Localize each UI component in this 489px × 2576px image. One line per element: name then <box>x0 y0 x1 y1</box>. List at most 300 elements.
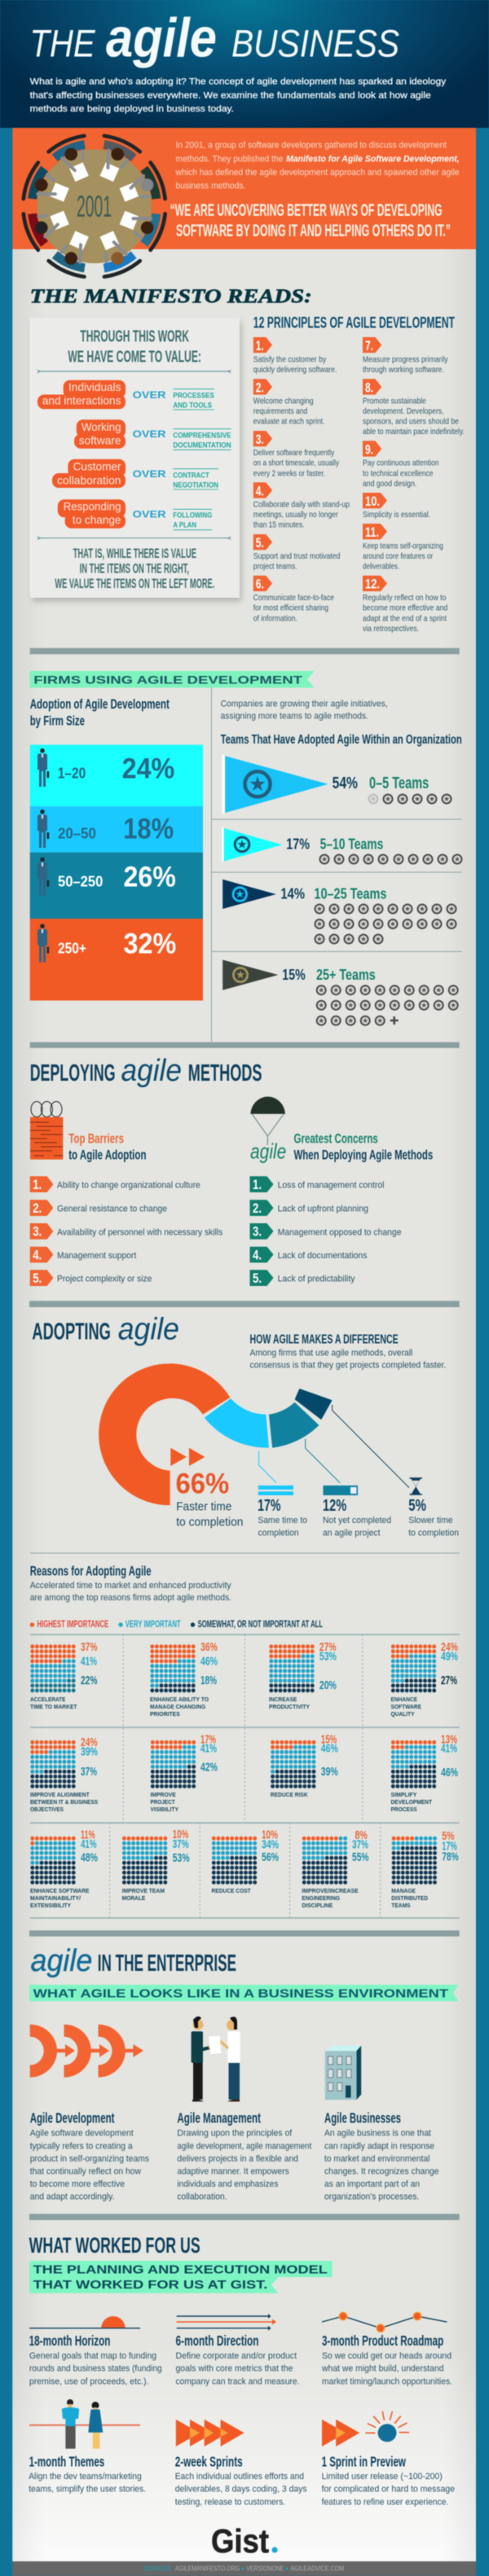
principle 12: adapt at the end of a sprint <box>363 614 447 623</box>
dot chart: improve engineering discipline: ENGINEERING <box>302 1894 340 1902</box>
principle 8: sponsors, and users should be <box>363 418 459 427</box>
value row: responding to change: to change <box>73 513 121 526</box>
barrier 3: Availability of personnel with necessary skills <box>57 1227 222 1237</box>
barrier 1: 1. <box>33 1177 42 1192</box>
dot chart: improve engineering discipline: 8% <box>355 1829 368 1842</box>
pennant: 15% 25+ teams <box>222 959 458 1025</box>
principle 6 <box>253 576 334 623</box>
principle 10: Simplicity is essential. <box>363 511 430 520</box>
stat: 12% not yet <box>323 1485 391 1538</box>
principle 7: Measure progress primarily <box>363 355 448 364</box>
stat: 12% not yet: Not yet completed <box>323 1516 391 1525</box>
dot chart: improve project visibility: PROJECT <box>150 1798 175 1806</box>
card closing statement: WE VALUE THE ITEMS ON THE LEFT MORE. <box>55 576 214 591</box>
dot chart: simplify development process: 46% <box>441 1766 458 1780</box>
ribbon: planning and execution model: THE PLANNING AND EXECUTION MODEL <box>33 2264 328 2277</box>
dot chart: accelerate time to market: TIME TO MARKET <box>30 1703 77 1710</box>
principle 6: 6. <box>256 577 264 592</box>
dot chart: manage distributed teams: 17% <box>442 1841 457 1854</box>
stat: 66% faster: to completion <box>176 1515 243 1529</box>
text: agile management: adaptive manner. It empowers <box>177 2166 289 2176</box>
value row: responding to change: Responding <box>64 500 121 513</box>
difference heading and text: HOW AGILE MAKES A DIFFERENCE <box>249 1332 399 1346</box>
text: agile businesses: Agile Businesses <box>324 2110 401 2126</box>
dot chart: enhance software quality: SOFTWARE <box>391 1703 421 1710</box>
value row: responding to change <box>58 499 212 530</box>
dot chart: increase productivity: 27% <box>319 1641 337 1654</box>
concern 5: 5. <box>253 1270 262 1286</box>
item: 1-month themes: teams, simplify the user stories. <box>29 2485 146 2495</box>
principle 5: project teams. <box>253 563 297 572</box>
card closing statement <box>55 546 214 591</box>
dot chart: improve team morale: MORALE <box>122 1894 145 1902</box>
barrier 1 <box>30 1176 200 1192</box>
concern 5 <box>249 1270 355 1286</box>
dot chart: manage distributed teams <box>391 1830 459 1909</box>
title <box>29 7 399 68</box>
principle 4: than 15 minutes. <box>253 521 305 530</box>
dot chart: improve engineering discipline: 37% <box>352 1839 368 1852</box>
dot chart: increase productivity: 20% <box>319 1679 337 1692</box>
value row: individuals: OVER <box>133 391 166 401</box>
dot chart: improve engineering discipline: IMPROVE/INCREASE <box>302 1887 359 1894</box>
principle 3 <box>253 431 340 478</box>
dot chart: enhance software maintainability: MAINTAINABILITY/ <box>30 1894 82 1902</box>
stat: 5% slower: Slower time <box>408 1516 453 1525</box>
dot chart: increase productivity: INCREASE <box>269 1696 297 1703</box>
ribbon: what agile looks like: WHAT AGILE LOOKS LIKE IN A BUSINESS ENVIRONMENT <box>33 1987 448 2000</box>
dot chart: reduce cost: 10% <box>262 1829 278 1842</box>
dot chart: improve alignment <box>30 1736 98 1813</box>
dot chart: improve alignment: 24% <box>81 1736 98 1749</box>
panel: header <box>0 0 489 128</box>
item: 1 sprint in preview: for complicated or hard to message <box>322 2485 455 2495</box>
principle 10: 10. <box>365 494 380 509</box>
stacked bar: 1-20: 1–20 <box>58 765 86 781</box>
dot chart: enhance software maintainability: 48% <box>81 1852 98 1865</box>
pennant: 17% 5-10 teams <box>222 827 461 863</box>
value row: working software: software <box>79 433 121 446</box>
panel: 12 principles <box>253 314 465 634</box>
dot chart: increase productivity <box>269 1641 337 1710</box>
dot chart: reduce risk: REDUCE RISK <box>271 1791 308 1798</box>
dot chart: improve project visibility: IMPROVE <box>150 1791 176 1798</box>
principle 4: Collaborate daily with stand-up <box>253 500 350 509</box>
principle 6: Communicate face-to-face <box>253 594 334 603</box>
dot chart: improve team morale: 37% <box>173 1838 189 1851</box>
barrier 4: 4. <box>33 1247 42 1262</box>
value row: individuals: Individuals <box>68 380 121 393</box>
stacked bar: 20-50: 18% <box>123 814 174 845</box>
dot chart: improve project visibility: 41% <box>200 1743 217 1756</box>
principle 1: quickly delivering software. <box>253 366 337 375</box>
stat: 17% same: Same time to <box>258 1516 307 1525</box>
panel: how agile makes a difference <box>99 1332 459 1538</box>
panel: top barriers: to Agile Adoption <box>68 1148 147 1163</box>
barriers heading: Top Barriers <box>68 1130 124 1146</box>
text: agile development: to become more effective <box>30 2179 125 2189</box>
item: 2-week sprints: 2-week Sprints <box>175 2453 243 2469</box>
principle 8: development. Developers, <box>363 407 444 416</box>
dot chart: improve alignment: IMPROVE ALIGNMENT <box>30 1791 90 1798</box>
panel: greatest concerns <box>249 1097 433 1286</box>
stat: 17% same: 17% <box>258 1497 281 1515</box>
value row: working software: DOCUMENTATION <box>173 441 231 450</box>
heading: adopting agile <box>32 1312 179 1346</box>
text: agile management: individuals and emphasizes <box>177 2179 279 2189</box>
dot chart: simplify development process: 41% <box>441 1743 457 1756</box>
item: 18-month horizon: premise, use of proceeds, etc.). <box>29 2376 148 2386</box>
pennant: 14% 10-25 teams: 14% <box>280 885 305 902</box>
reasons heading: Accelerated time to market and enhanced productivity <box>30 1581 231 1591</box>
dot chart: increase productivity: 53% <box>319 1651 337 1664</box>
item: 6-month direction: goals with core metrics that the <box>176 2364 293 2374</box>
icon: round table with eight people: 2001 <box>77 190 112 223</box>
stat: 17% same: completion <box>258 1528 299 1538</box>
principle 8: able to maintain pace indefinitely. <box>363 428 465 437</box>
heading: what worked for us: WHAT WORKED FOR US <box>29 2233 200 2258</box>
pennant: 15% 25+ teams: 25+ Teams <box>316 967 376 983</box>
concern 1 <box>249 1176 385 1192</box>
stat: 5% slower: to completion <box>408 1528 459 1538</box>
logo: Gist: Gist <box>211 2522 269 2560</box>
dot chart: enhance software quality: 27% <box>441 1674 457 1687</box>
intro paragraph: Manifesto for Agile Software Development, <box>286 154 460 164</box>
text: agile management: collaboration. <box>177 2192 227 2202</box>
icon: round table with eight people <box>21 134 168 279</box>
value row: responding to change: OVER <box>133 510 166 520</box>
stacked bar: 20-50: 20–50 <box>58 826 96 842</box>
text: agile development: product in self-organizing teams <box>30 2154 149 2164</box>
dot chart: improve project visibility: 42% <box>200 1761 218 1774</box>
stacked bar: 50-250: 50–250 <box>58 874 103 890</box>
card heading: THROUGH THIS WORK <box>80 327 189 345</box>
dot chart: enhance software maintainability: EXTENSIBILITY <box>30 1902 71 1909</box>
item: 3-month product roadmap <box>321 2312 452 2386</box>
barrier 5 <box>30 1270 152 1286</box>
value row: customer collaboration <box>52 459 218 489</box>
dot chart: accelerate time to market <box>30 1641 97 1710</box>
footer: sources: VERSIONONE <box>246 2565 284 2573</box>
principle 4 <box>253 482 350 530</box>
principle 9: Pay continuous attention <box>363 459 439 468</box>
principle 1: Satisfy the customer by <box>253 355 327 364</box>
concern 2: Lack of upfront planning <box>278 1204 368 1213</box>
dot chart: enhance software maintainability: ENHANCE SOFTWARE <box>30 1887 90 1894</box>
dot chart: accelerate time to market: 37% <box>81 1641 97 1654</box>
dot chart: enhance ability to manage changing priorities: 36% <box>200 1641 218 1654</box>
dot chart: manage distributed teams: DISTRIBUTED <box>391 1894 428 1902</box>
icon: brick wall with barbed wire <box>30 1101 63 1160</box>
principle 4: 4. <box>256 483 264 498</box>
panel: top barriers <box>30 1101 222 1286</box>
principle 9 <box>363 441 439 489</box>
principle 11: 11. <box>365 524 379 540</box>
text: agile businesses: as an important part of an <box>324 2179 420 2189</box>
dot chart: improve team morale: IMPROVE TEAM <box>122 1887 165 1894</box>
dot chart: reduce risk: 39% <box>321 1766 338 1779</box>
principle 2 <box>253 379 324 427</box>
text: agile management <box>177 2110 312 2202</box>
text: agile management: Agile Management <box>177 2110 261 2126</box>
stacked bar: 250+: 32% <box>124 928 176 960</box>
icon: two people exchanging a paper <box>192 2016 240 2101</box>
dot chart: simplify development process: 13% <box>441 1733 457 1746</box>
concern 1: 1. <box>253 1177 262 1192</box>
principle 6: of information. <box>253 614 297 623</box>
text: agile development: typically refers to creating a <box>30 2141 133 2151</box>
stacked bar: 250+ <box>30 919 203 1000</box>
item: 18-month horizon <box>29 2316 162 2386</box>
reasons heading: Reasons for Adopting Agile <box>30 1564 152 1578</box>
dot chart: enhance software quality <box>391 1641 458 1718</box>
value row: customer collaboration: OVER <box>133 470 166 480</box>
barrier 1: Ability to change organizational culture <box>57 1181 200 1191</box>
text: agile development <box>30 2110 149 2202</box>
item: 2-week sprints: Each individual outlines efforts and <box>175 2472 304 2482</box>
legend <box>30 1620 323 1630</box>
value row: individuals: and interactions <box>42 394 121 407</box>
panel: manifesto card <box>29 318 241 601</box>
s-curve segmented chart <box>99 1363 409 1505</box>
principle 6: for most efficient sharing <box>253 604 328 613</box>
value row: individuals: AND TOOLS <box>173 401 212 410</box>
panel: what worked for us <box>29 2233 455 2507</box>
principle 7: through working software. <box>363 366 444 375</box>
concern 2: 2. <box>253 1200 262 1216</box>
barrier 5: Project complexity or size <box>57 1275 152 1284</box>
dot chart: increase productivity: PRODUCTIVITY <box>269 1703 310 1710</box>
principle 2: 2. <box>256 380 264 395</box>
concern 4 <box>249 1247 368 1262</box>
principle 9: to technical excellence <box>363 469 434 478</box>
dot chart: manage distributed teams: 5% <box>442 1830 455 1843</box>
dot chart: reduce cost: 34% <box>262 1838 279 1851</box>
dot chart: reduce risk: 46% <box>321 1743 338 1756</box>
item: 1-month themes: 1-month Themes <box>29 2453 104 2469</box>
stat: 5% slower <box>408 1478 459 1538</box>
concern 4: 4. <box>253 1247 262 1262</box>
pennant: 54% 0-5 teams: 0–5 Teams <box>369 775 429 792</box>
principle 7: 7. <box>365 338 373 353</box>
intro text: methods are being deployed in business today. <box>30 104 234 114</box>
value row: customer collaboration: CONTRACT <box>173 471 209 480</box>
dot chart: improve team morale: 53% <box>173 1852 190 1865</box>
reasons heading <box>30 1564 231 1603</box>
value row: working software: Working <box>82 420 121 433</box>
footer: sources: SOURCES: <box>144 2565 173 2573</box>
item: 1-month themes: Align the dev teams/marketing <box>29 2472 142 2482</box>
pennant: 15% 25+ teams: 15% <box>282 967 306 983</box>
principle 12 <box>363 576 447 634</box>
item: 6-month direction: 6-month Direction <box>176 2332 259 2349</box>
ribbon: planning and execution model <box>29 2261 333 2293</box>
dot chart: accelerate time to market: 41% <box>81 1656 97 1669</box>
panel: adoption by firm size <box>30 697 203 1000</box>
dot chart: improve engineering discipline: 55% <box>352 1851 369 1864</box>
heading: deploying agile methods: agile <box>121 1054 182 1088</box>
principle 8 <box>363 379 465 437</box>
icon: agile development arrows <box>30 2025 143 2078</box>
ribbon: what agile looks like <box>29 1985 459 2001</box>
value row: working software <box>74 419 231 450</box>
principle 3: on a short timescale, usually <box>253 459 340 468</box>
enterprise heading: agile <box>31 1944 92 1978</box>
concern 1: Loss of management control <box>278 1181 385 1191</box>
dot chart: simplify development process <box>391 1733 458 1813</box>
item: 6-month direction <box>176 2314 299 2386</box>
dot chart: improve project visibility <box>150 1733 218 1813</box>
icon: agile parachute <box>250 1097 286 1164</box>
dot chart: improve engineering discipline: DISCIPLINE <box>302 1902 333 1909</box>
principle 12: Regularly reflect on how to <box>363 594 446 603</box>
intro paragraph: methods. They published the <box>176 154 284 164</box>
principle 3: every 2 weeks or faster. <box>253 469 325 478</box>
item: 6-month direction: company can track and measure. <box>176 2376 299 2386</box>
value row: responding to change: A PLAN <box>173 520 196 529</box>
difference heading and text: Among firms that use agile methods, overall <box>249 1349 412 1358</box>
barrier 2 <box>30 1200 167 1216</box>
text: agile businesses: changes. It recognizes change <box>324 2166 438 2176</box>
barrier 4: Management support <box>57 1251 137 1261</box>
intro paragraph: business methods. <box>176 182 246 191</box>
dot chart: improve alignment: OBJECTIVES <box>30 1806 64 1813</box>
pennant: 17% 5-10 teams: 17% <box>286 836 310 853</box>
principle 11: Keep teams self-organizing <box>363 542 443 551</box>
panel: reasons for adopting agile <box>30 1564 460 1918</box>
barrier 2: General resistance to change <box>57 1204 167 1213</box>
text: agile development: Agile Development <box>30 2110 115 2126</box>
principle 2: requirements and <box>253 407 307 416</box>
principle 3: 3. <box>256 432 264 447</box>
adoption heading: Adoption of Agile Development <box>30 697 170 712</box>
text: agile businesses: An agile business is one that <box>324 2129 432 2139</box>
item: 18-month horizon: 18-month Horizon <box>29 2332 111 2349</box>
dot chart: enhance software quality: 24% <box>441 1641 458 1654</box>
heading: deploying agile methods: METHODS <box>188 1060 262 1086</box>
item: 3-month product roadmap: So we could get our heads around <box>322 2351 452 2361</box>
barrier 4 <box>30 1247 137 1262</box>
value row: working software: OVER <box>133 430 166 440</box>
dot chart: reduce risk <box>271 1733 338 1798</box>
barrier 3 <box>30 1223 222 1240</box>
heading: adopting agile: ADOPTING <box>32 1319 111 1345</box>
item: 1 sprint in preview: 1 Sprint in Preview <box>322 2453 406 2469</box>
ribbon: firms using agile development <box>29 671 315 687</box>
principle 5: 5. <box>256 535 264 551</box>
item: 3-month product roadmap: what we might build, understand <box>321 2364 444 2374</box>
principle 8: Promote sustainable <box>363 397 426 406</box>
ribbon: firms using agile development: FIRMS USING AGILE DEVELOPMENT <box>33 674 303 686</box>
ribbon: planning and execution model: THAT WORKED FOR US AT GIST. <box>33 2279 267 2292</box>
dot chart: enhance ability to manage changing priorities: MANAGE CHANGING <box>150 1703 205 1710</box>
card heading <box>68 327 201 366</box>
teams intro text: Companies are growing their agile initiatives, <box>221 699 388 709</box>
concern 3: 3. <box>253 1224 262 1240</box>
teams intro text: assigning more teams to agile methods. <box>221 711 368 721</box>
dot chart: reduce risk: 15% <box>321 1733 337 1746</box>
pennant: 14% 10-25 teams <box>222 880 456 943</box>
panel: teams adopted within an organization <box>212 699 462 1025</box>
principle 12: become more effective and <box>363 604 447 613</box>
principle 9: and good design. <box>363 480 416 489</box>
dot chart: enhance software quality: ENHANCE <box>391 1696 417 1703</box>
title: agile <box>106 7 217 68</box>
principle 12: via retrospectives. <box>363 625 419 634</box>
dot chart: improve project visibility: 17% <box>200 1733 216 1746</box>
intro paragraph <box>175 141 460 191</box>
stat: 66% faster: 66% <box>176 1468 229 1499</box>
dot chart: enhance ability to manage changing priorities: 46% <box>200 1656 218 1669</box>
value row: customer collaboration: Customer <box>73 460 121 473</box>
principle 11 <box>363 524 443 572</box>
stacked bar: 20-50 <box>30 806 203 853</box>
dot chart: improve team morale: 10% <box>173 1828 189 1841</box>
principle 5: Support and trust motivated <box>253 552 341 561</box>
dot chart: simplify development process: DEVELOPMENT <box>391 1798 432 1806</box>
dot chart: manage distributed teams: MANAGE <box>391 1887 416 1894</box>
title: THE <box>29 21 95 65</box>
footer: sources: AGILEMANIFESTO.ORG <box>175 2565 240 2573</box>
dot chart: enhance ability to manage changing priorities: ENHANCE ABILITY TO <box>150 1696 209 1703</box>
dot chart: enhance ability to manage changing priorities: 18% <box>200 1674 217 1687</box>
icon: agile parachute: agile <box>250 1139 286 1164</box>
intro text: What is agile and who's adopting it? The concept of agile development has sparked an ideology <box>30 77 447 86</box>
intro paragraph: In 2001, a group of software developers gathered to discuss development <box>176 141 447 151</box>
principle 8: 8. <box>365 380 373 395</box>
item: 3-month product roadmap: market timing/launch opportunities. <box>322 2376 452 2386</box>
reasons heading: are among the top reasons firms adopt agile methods. <box>30 1593 231 1603</box>
dot chart: simplify development process: SIMPLIFY <box>391 1791 416 1798</box>
footer: sources <box>12 2561 476 2576</box>
item: 1-month themes <box>29 2399 146 2495</box>
dot chart: enhance software maintainability <box>30 1828 98 1909</box>
stat: 5% slower: 5% <box>408 1497 426 1515</box>
value row: individuals <box>37 380 214 410</box>
stacked bar: 50-250: 26% <box>124 862 176 893</box>
text: agile businesses: can rapidly adapt in response <box>324 2141 434 2151</box>
principle 2: evaluate at each sprint. <box>253 418 324 427</box>
panel: 2001 orange intro <box>12 128 476 249</box>
dot chart: improve alignment: 39% <box>81 1746 98 1759</box>
pennant: 17% 5-10 teams: 5–10 Teams <box>320 836 383 853</box>
card heading: WE HAVE COME TO VALUE: <box>68 348 201 366</box>
principle 2: Welcome changing <box>253 397 314 406</box>
principle 11: around core features or <box>363 552 434 561</box>
dot chart: manage distributed teams: TEAMS <box>391 1902 411 1909</box>
legend: VERY IMPORTANT <box>126 1620 181 1630</box>
principle 11: deliverables. <box>363 563 399 572</box>
panel: agile in the enterprise <box>29 1944 459 2202</box>
intro text <box>30 77 447 114</box>
principle 4: meetings, usually no longer <box>253 511 338 520</box>
quote <box>170 201 451 240</box>
dot chart: accelerate time to market: ACCELERATE <box>30 1696 65 1703</box>
item: 6-month direction: Define corporate and/or product <box>176 2351 297 2361</box>
text: agile businesses: to market and environmental <box>324 2154 430 2164</box>
legend: HIGHEST IMPORTANCE <box>37 1620 108 1630</box>
teams intro text <box>221 699 388 721</box>
stat: 12% not yet: an agile project <box>323 1528 381 1538</box>
text: agile management: Drawing upon the principles of <box>177 2129 293 2139</box>
adoption heading: by Firm Size <box>30 713 85 728</box>
adoption heading <box>30 697 170 728</box>
concern 3 <box>249 1223 401 1240</box>
dot chart: manage distributed teams: 78% <box>442 1850 459 1863</box>
dot chart: reduce cost <box>212 1829 279 1894</box>
text: agile management: agile development, agile management <box>177 2141 312 2151</box>
legend: SOMEWHAT, OR NOT IMPORTANT AT ALL <box>198 1620 323 1630</box>
